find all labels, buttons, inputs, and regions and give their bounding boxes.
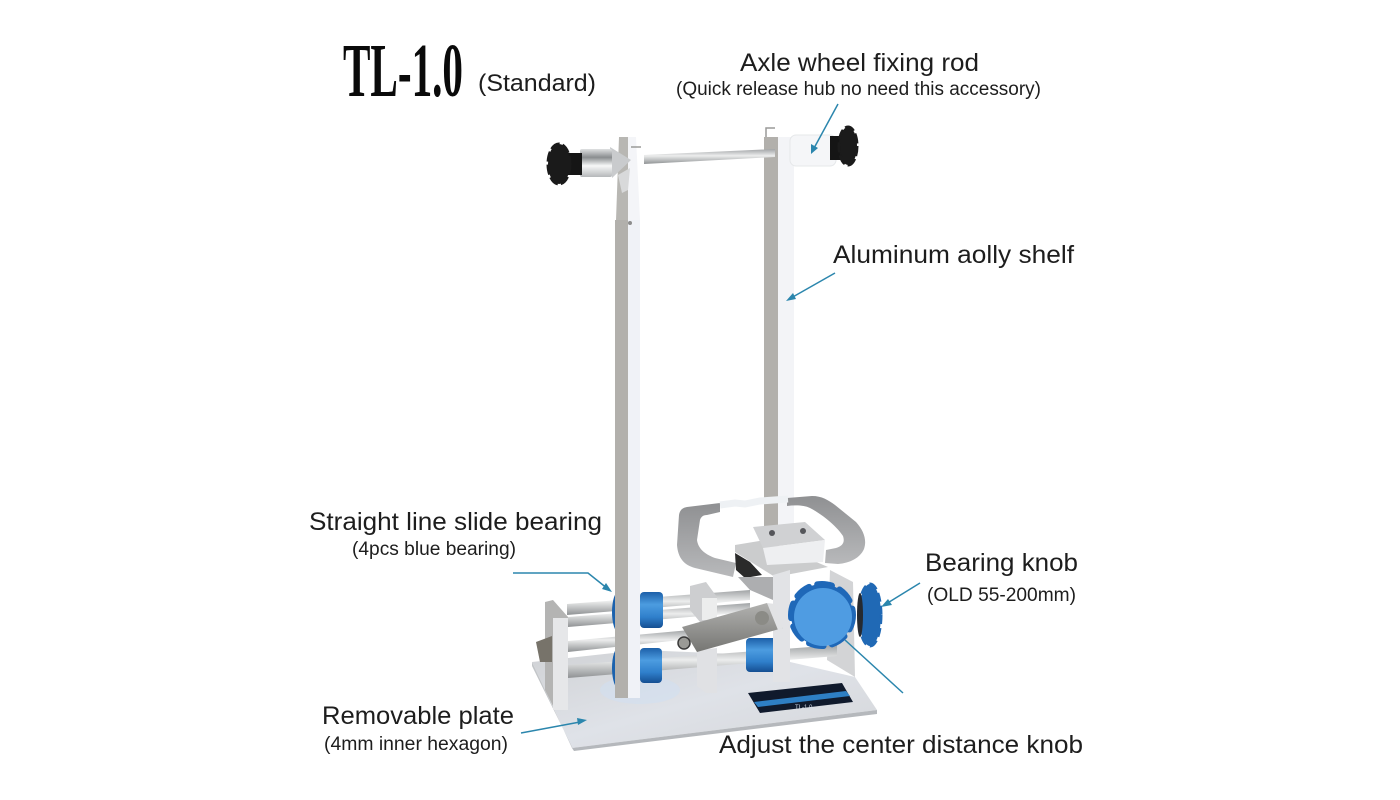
arrow: shelf	[786, 273, 835, 301]
label: straight line slide bearing: (4pcs blue bearing)	[352, 539, 516, 560]
label: axle wheel fixing rod: (Quick release hub no need this accessory)	[676, 79, 1041, 100]
label: adjust centre distance knob: Adjust the center distance knob	[719, 731, 1083, 759]
axle rod	[644, 149, 775, 164]
label plate on base: TL-1.0	[795, 705, 813, 711]
label plate on base	[748, 683, 853, 713]
label: removable plate	[322, 702, 514, 755]
clamp centre assembly	[735, 522, 828, 682]
label: aluminum alloy shelf: Aluminum aolly shelf	[833, 241, 1074, 269]
title: TL-1.0	[343, 29, 463, 113]
guide rods	[567, 590, 837, 678]
label: straight line slide bearing: Straight line slide bearing	[309, 508, 602, 536]
label: bearing knob	[925, 549, 1078, 606]
label: bearing knob: Bearing knob	[925, 549, 1078, 577]
big blue centre knob	[791, 584, 853, 646]
label: axle wheel fixing rod	[676, 49, 1041, 100]
arrow: removable plate	[521, 718, 587, 733]
right axle knob	[790, 127, 857, 166]
label: removable plate: Removable plate	[322, 702, 514, 730]
left axle knob	[548, 144, 631, 193]
arrow: bearing knob	[881, 583, 920, 607]
swing arm with bolts	[678, 603, 783, 652]
left end block	[536, 600, 568, 710]
label: bearing knob: (OLD 55-200mm)	[927, 585, 1076, 606]
arrow: slide bearing	[513, 573, 612, 592]
arrow: axle rod	[811, 104, 838, 154]
wheel caliper arms	[677, 496, 865, 577]
middle block	[690, 582, 717, 693]
base plate	[532, 650, 877, 751]
blue side knob	[857, 584, 881, 646]
label: axle wheel fixing rod: Axle wheel fixing rod	[740, 49, 979, 77]
product: tire truing stand	[532, 127, 881, 751]
subtitle: standard: (Standard)	[478, 70, 596, 97]
leader line: centre distance knob	[845, 640, 903, 693]
right upright	[764, 128, 794, 537]
left upright	[615, 137, 641, 698]
blue slide bearings	[612, 591, 778, 689]
label: removable plate: (4mm inner hexagon)	[324, 734, 508, 755]
label: straight line slide bearing	[309, 508, 602, 560]
rear right block	[827, 570, 855, 677]
